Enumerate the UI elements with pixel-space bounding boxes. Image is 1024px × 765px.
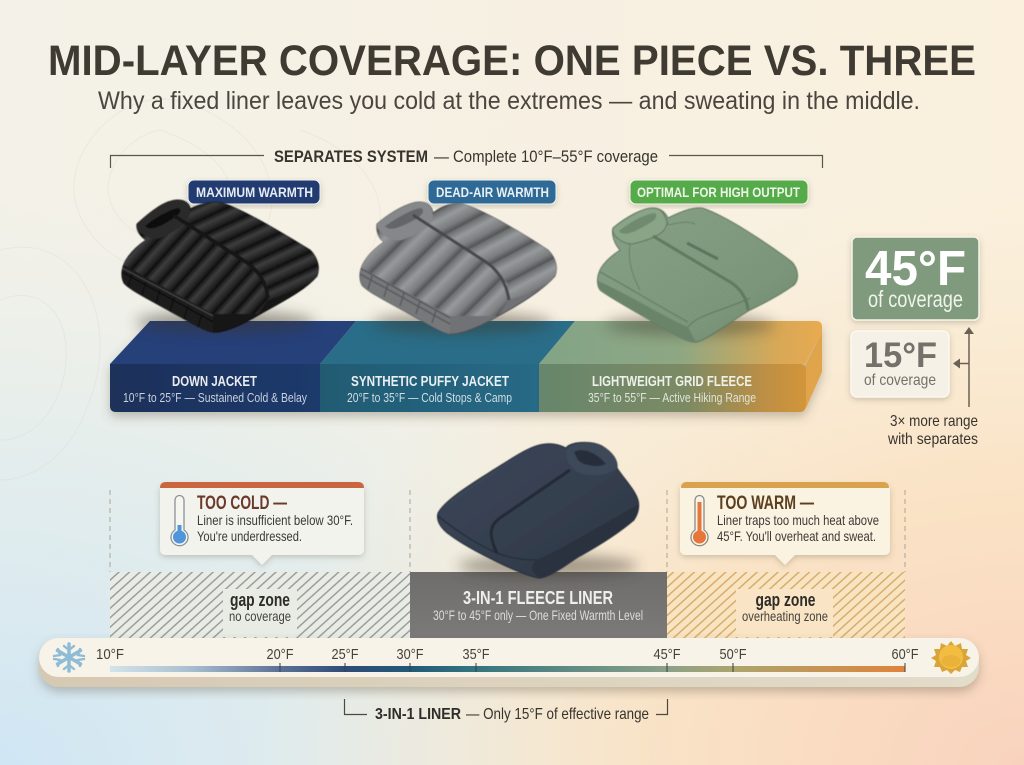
bar front face: lightweight grid fleece: LIGHTWEIGHT GRID FLEECE: [592, 374, 752, 390]
note: 3× more range: 3× more range: [890, 413, 978, 430]
badge: maximum warmth: MAXIMUM WARMTH: [196, 185, 313, 200]
separates system bracket heading: SEPARATES SYSTEM: [274, 147, 428, 166]
badge: dead-air warmth: [428, 180, 556, 204]
icon: black down jacket: [120, 190, 330, 335]
icon: snowflake: [54, 644, 84, 671]
subtitle: Why a fixed liner leaves you cold at the extremes — and sweating in the middle.: [98, 87, 920, 115]
bar front face: synthetic puffy jacket: SYNTHETIC PUFFY JACKET: [351, 374, 509, 390]
callout: too cold: You're underdressed.: [197, 528, 302, 544]
badge: optimal for high output: OPTIMAL FOR HIGH OUTPUT: [637, 185, 801, 200]
axis labels: 30°F: [396, 646, 424, 663]
bar right face: [805, 332, 822, 408]
gap zone: too warm: overheating zone: [742, 608, 828, 624]
axis labels: 10°F: [96, 646, 124, 663]
stat: 15°F of coverage: of coverage: [864, 372, 936, 389]
3-in-1 liner range bracket: [344, 699, 668, 723]
separates system bracket heading: [110, 147, 822, 168]
badge: dead-air warmth: DEAD-AIR WARMTH: [436, 185, 549, 200]
title: MID-LAYER COVERAGE: ONE PIECE VS. THREE: [48, 37, 976, 85]
axis labels: 60°F: [892, 646, 918, 663]
stat: 45°F of coverage: of coverage: [868, 286, 963, 312]
block: 3-in-1 fleece liner: 30°F to 45°F only — One Fixed Warmth Level: [433, 607, 643, 623]
note: 3× more range: [887, 413, 978, 448]
separates system bracket heading: — Complete 10°F–55°F coverage: [434, 147, 658, 166]
callout: too cold: Liner is insufficient below 30°F.: [197, 512, 353, 528]
block: 3-in-1 fleece liner: 3-IN-1 FLEECE LINER: [463, 588, 613, 608]
bar top face: fleece: [539, 321, 822, 364]
layered coverage bar: [110, 321, 822, 412]
callout: too cold: [160, 482, 364, 565]
stat: 15°F of coverage: [851, 331, 949, 397]
arrow: from 15°F up to 45°F: [953, 327, 974, 407]
badge: optimal for high output: [630, 180, 808, 204]
callout: too warm: Liner traps too much heat above: [717, 512, 879, 528]
callout: too warm: TOO WARM —: [717, 493, 814, 514]
axis labels: [96, 646, 918, 663]
bar front face: synthetic puffy jacket: 20°F to 35°F — Cold Stops & Camp: [347, 391, 512, 405]
temperature axis: [39, 638, 979, 687]
note: 3× more range: with separates: [887, 431, 978, 448]
bar top face: down: [110, 321, 356, 364]
gap zone: too cold: gap zone: [230, 590, 290, 610]
gap zone dashed boundaries: [110, 490, 905, 572]
stat: 45°F of coverage: 45°F: [865, 242, 966, 296]
stat: 15°F of coverage: 15°F: [864, 336, 937, 375]
callout: too warm: [680, 482, 890, 565]
bar top face: synthetic: [320, 321, 575, 364]
axis labels: 25°F: [332, 646, 358, 663]
temperature gradient scale: [110, 666, 905, 672]
callout: too warm: 45°F. You'll overheat and sweat.: [717, 528, 876, 544]
axis labels: 50°F: [720, 646, 746, 663]
bar front face: down jacket: 10°F to 25°F — Sustained Cold & Belay: [123, 391, 308, 405]
icon: hot thermometer: [691, 496, 708, 546]
gap zone: too cold: no coverage: [229, 608, 291, 624]
bar front face: synthetic puffy jacket: [320, 364, 539, 412]
icon: navy fleece liner jacket: [438, 442, 639, 578]
icon: cold thermometer: [171, 496, 188, 546]
block: 3-in-1 fleece liner: [410, 572, 667, 638]
gap zone: too warm: [667, 572, 905, 638]
axis labels: 20°F: [266, 646, 294, 663]
gap zone: too warm: gap zone: [756, 590, 816, 610]
bar front face: lightweight grid fleece: 35°F to 55°F — Active Hiking Range: [588, 391, 756, 405]
bar front face: down jacket: DOWN JACKET: [172, 374, 257, 390]
axis labels: 35°F: [462, 646, 490, 663]
badge: maximum warmth: [188, 180, 320, 204]
icon: green grid fleece: [597, 208, 798, 342]
icon: sun: [931, 641, 971, 674]
icon: grey synthetic puffy jacket: [358, 200, 558, 340]
bar front face: down jacket: [110, 364, 320, 412]
axis labels: 45°F: [654, 646, 680, 663]
3-in-1 liner range bracket: — Only 15°F of effective range: [466, 706, 649, 723]
gap zone: too cold: [110, 572, 410, 638]
stat: 45°F of coverage: [852, 237, 979, 320]
callout: too cold: TOO COLD —: [197, 493, 287, 514]
3-in-1 liner range bracket: 3-IN-1 LINER: [375, 706, 461, 723]
bar front face: lightweight grid fleece: [539, 364, 806, 412]
